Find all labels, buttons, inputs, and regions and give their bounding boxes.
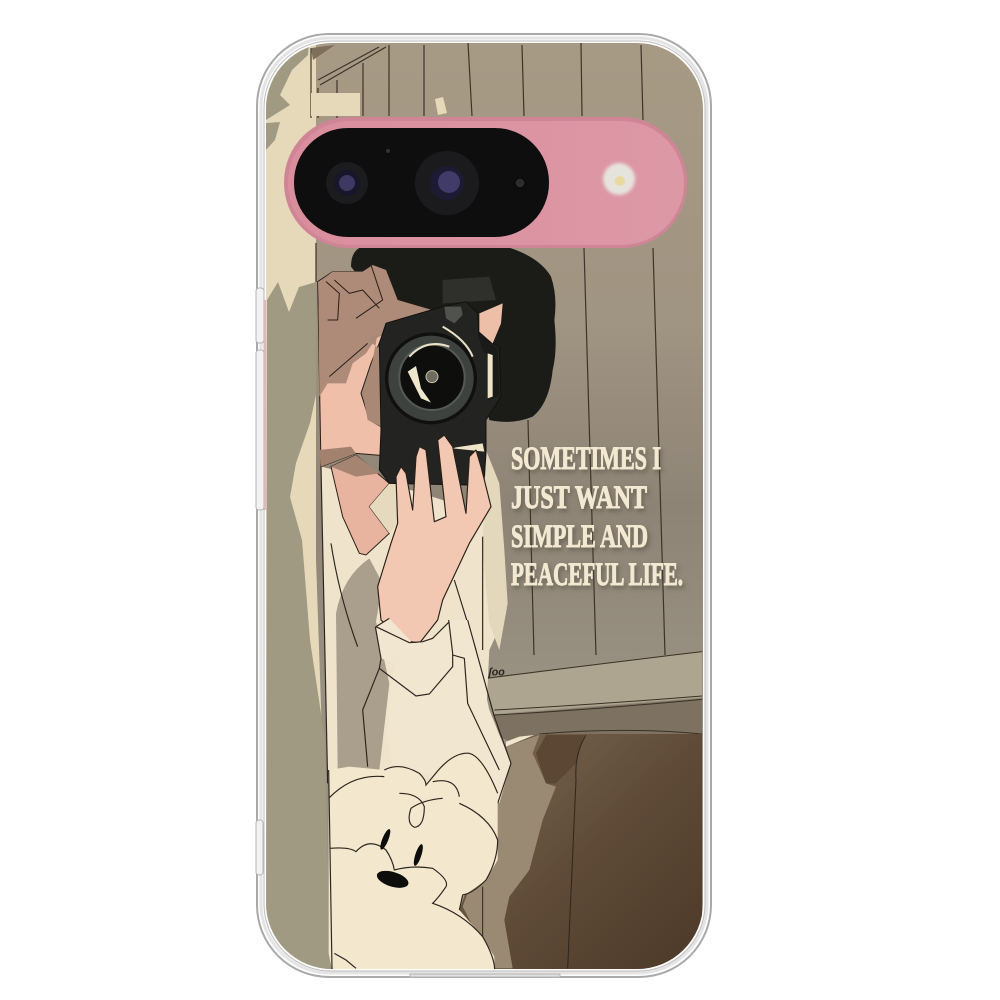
grip highlight — [478, 335, 499, 400]
quote: SIMPLE AND — [511, 519, 648, 555]
quote — [511, 441, 683, 593]
wood wall background — [266, 43, 704, 969]
olive shadows on left strip — [266, 43, 330, 969]
camera window — [294, 128, 549, 237]
front hand — [378, 435, 491, 643]
dog body — [329, 753, 498, 970]
forearm — [331, 455, 389, 555]
sunlit left strip — [266, 43, 330, 969]
shirt torso — [318, 247, 556, 783]
shirt shadow — [336, 558, 389, 770]
side buttons — [256, 288, 560, 977]
phone case illustration — [256, 33, 712, 978]
transparent case outline — [257, 34, 711, 977]
left hand — [318, 265, 438, 467]
bottom stripe — [453, 443, 484, 452]
floor dark patch — [536, 735, 584, 783]
plank lines — [311, 43, 665, 655]
sleeve — [376, 618, 511, 803]
floor — [459, 734, 702, 970]
window sill — [459, 652, 702, 970]
quote: JUST WANT — [511, 480, 647, 516]
lens — [385, 327, 477, 424]
viewfinder — [444, 307, 463, 323]
rear lenses — [326, 151, 479, 215]
microphone dot — [386, 149, 390, 153]
maker mark: ʃoo — [486, 667, 505, 679]
camera — [379, 302, 503, 485]
quote: SOMETIMES I — [511, 441, 661, 477]
wall corner — [311, 45, 335, 60]
camera bar — [284, 117, 687, 248]
quote: PEACEFUL LIFE. — [511, 557, 683, 593]
flash — [603, 163, 635, 195]
dog nose — [376, 870, 408, 888]
dog eyes — [380, 829, 423, 866]
sensor — [515, 178, 525, 188]
light patch on wall — [311, 93, 447, 116]
hair — [351, 247, 556, 422]
ear — [479, 303, 503, 343]
artwork — [266, 43, 704, 970]
sleeve and dog — [329, 618, 511, 970]
floor light band — [463, 735, 556, 968]
pink side reflection — [264, 300, 267, 510]
